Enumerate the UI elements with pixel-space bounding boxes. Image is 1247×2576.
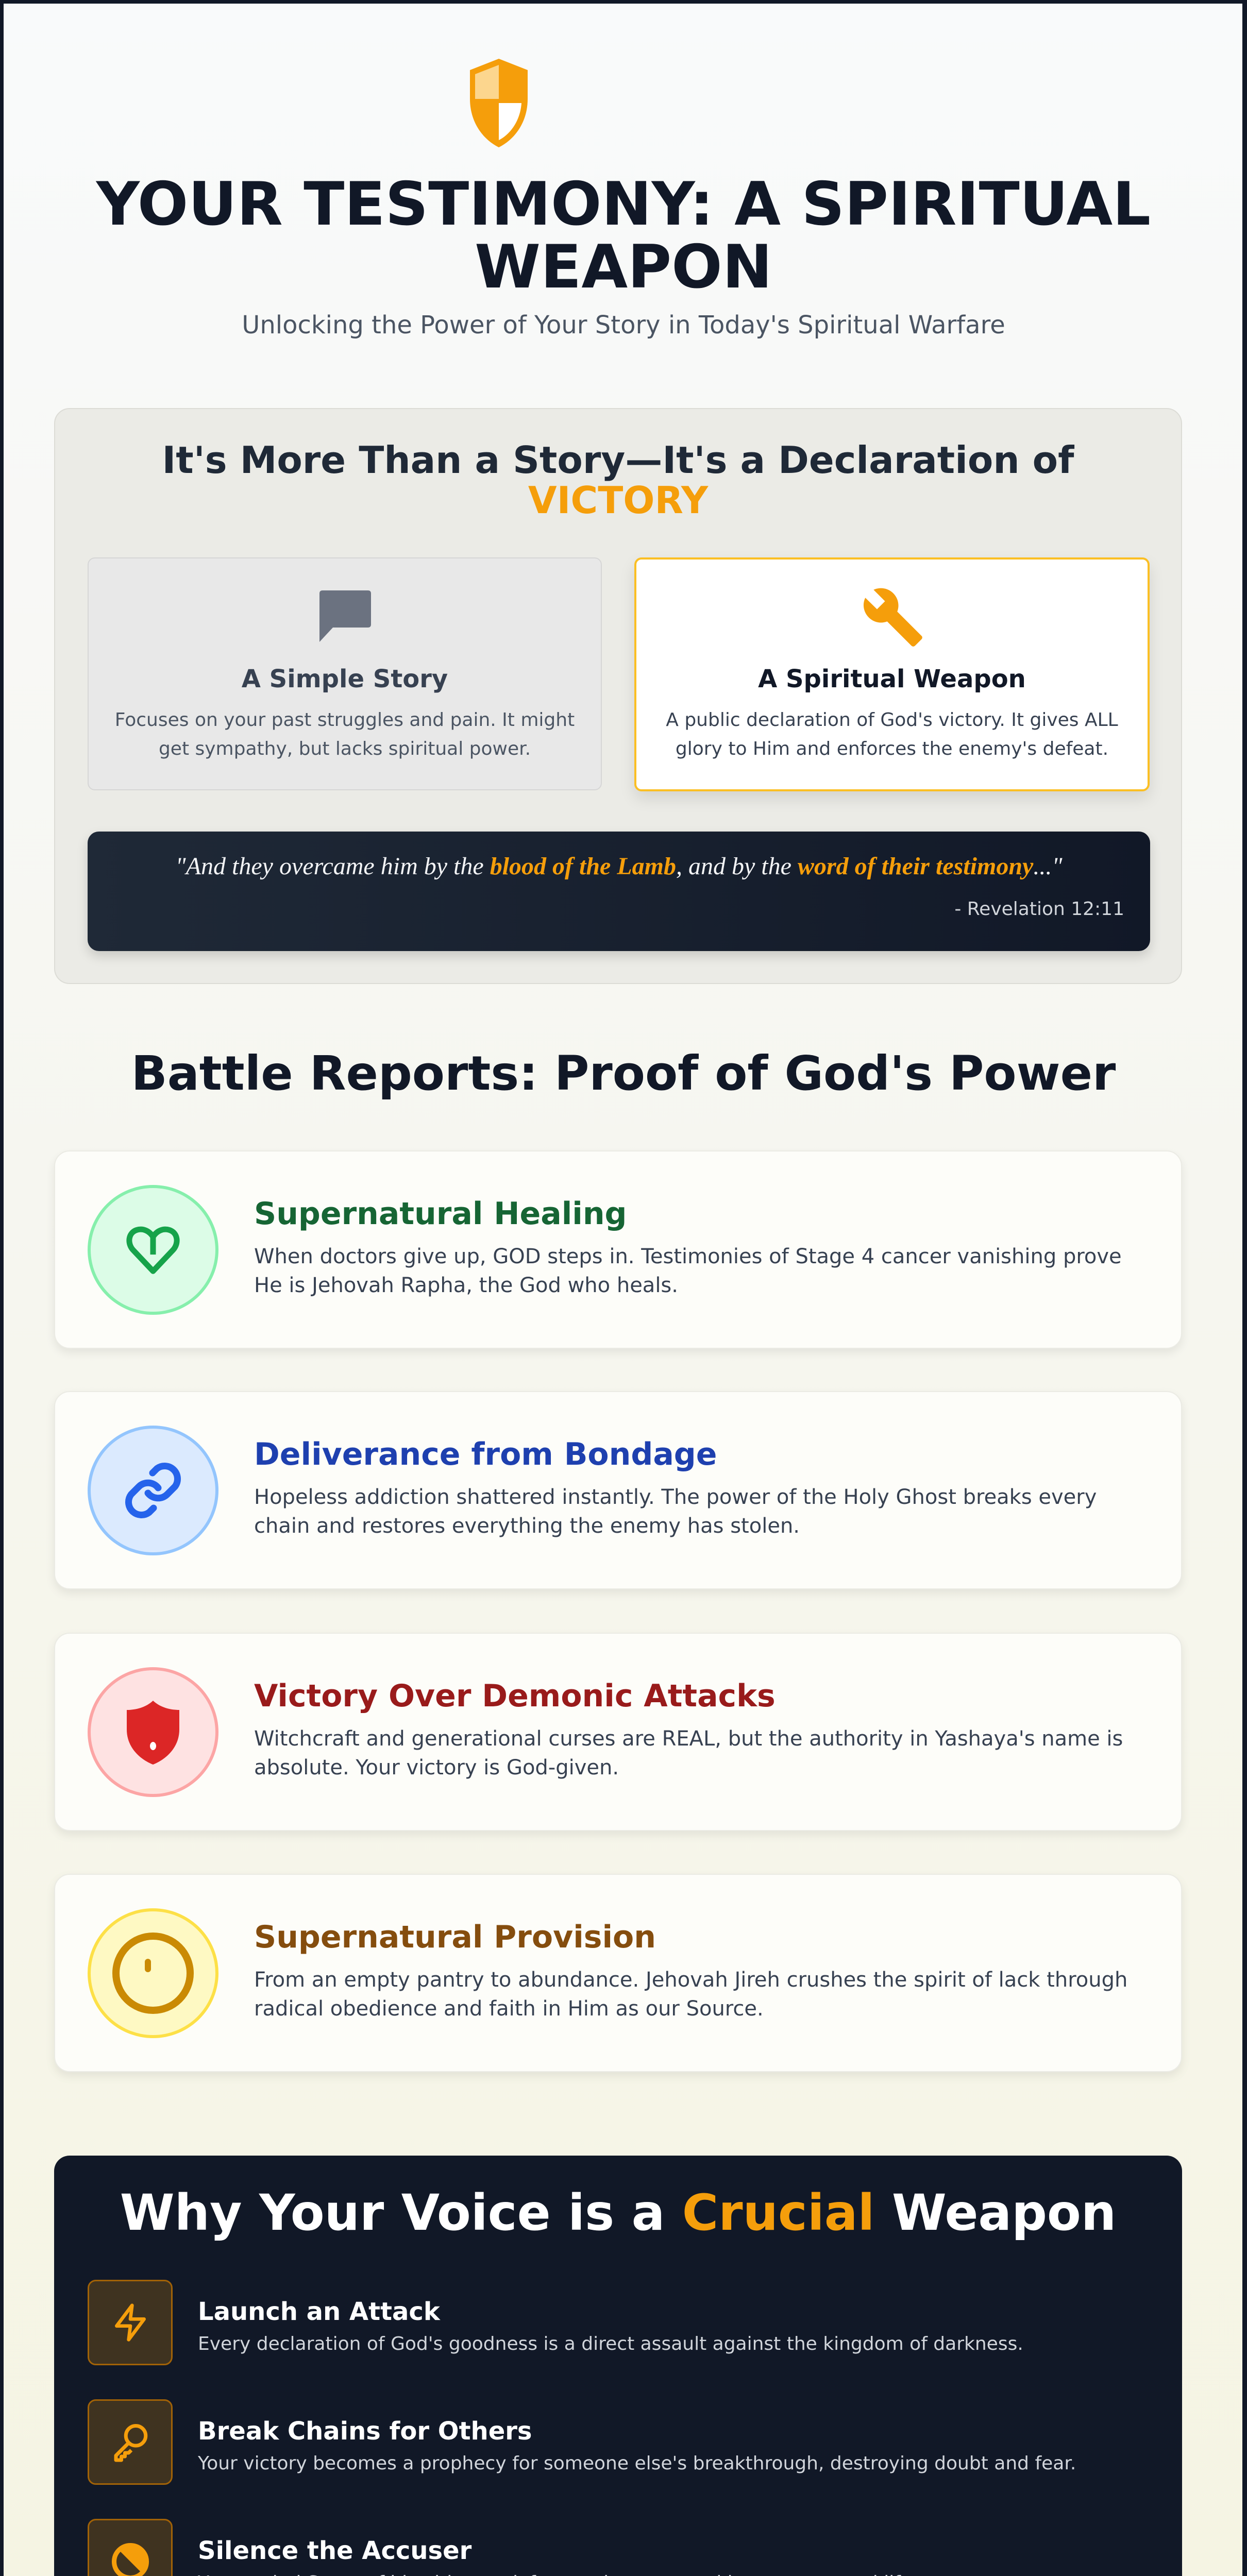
text: When doctors give up, GOD steps in. Testimonies of Stage 4 cancer vanishing prove He is Jehovah Rapha, the God who heals. — [254, 1245, 1122, 1297]
heading: battle reports: Battle Reports: Proof of God's Power — [131, 1046, 1116, 1101]
card: deliverance — [54, 1391, 1182, 1589]
icon: coin — [88, 1908, 218, 2038]
icon: blocked circle — [88, 2519, 173, 2576]
card: spiritual weapon — [634, 557, 1150, 791]
card: demonic attacks — [54, 1633, 1182, 1831]
scripture quote: "And they overcame him by the blood of the Lamb, and by the word of their testimony..." — [176, 853, 1062, 880]
title: WEAPON — [475, 232, 772, 302]
reference: - Revelation 12:11 — [954, 899, 1124, 920]
icon: chat bubble — [319, 590, 371, 642]
item: break chains — [88, 2399, 1076, 2485]
icon: red shield — [88, 1667, 218, 1797]
item: silence accuser — [88, 2519, 918, 2576]
card title: A Spiritual Weapon — [758, 665, 1026, 693]
text: Hopeless addiction shattered instantly. The power of the Holy Ghost breaks every chain and restores everything the enemy has stolen. — [254, 1485, 1097, 1538]
item: launch an attack — [88, 2280, 1023, 2365]
text: Your victory becomes a prophecy for someone else's breakthrough, destroying doubt and fear. — [198, 2453, 1076, 2474]
title: Victory Over Demonic Attacks — [254, 1678, 776, 1714]
text: Witchcraft and generational curses are REAL, but the authority in Yashaya's name is absolute. Your victory is God-given. — [254, 1727, 1123, 1780]
title: Break Chains for Others — [198, 2417, 532, 2446]
text: From an empty pantry to abundance. Jehovah Jireh crushes the spirit of lack through radical obedience and faith in Him as our Source. — [254, 1968, 1127, 2021]
card text: A public declaration of God's victory. It gives ALL glory to Him and enforces the enemy's defeat. — [666, 709, 1118, 759]
card: simple story — [88, 557, 602, 790]
title: Supernatural Healing — [254, 1196, 627, 1232]
icon: key — [88, 2399, 173, 2485]
panel: why your voice — [54, 2156, 1182, 2576]
card: supernatural healing — [54, 1150, 1182, 1349]
title: Deliverance from Bondage — [254, 1436, 717, 1472]
icon: heart — [88, 1185, 218, 1315]
panel heading: It's More Than a Story—It's a Declaration of — [162, 438, 1074, 482]
panel heading — [162, 438, 1075, 522]
card title: A Simple Story — [242, 665, 448, 693]
icon: wrench — [864, 588, 922, 647]
title: YOUR TESTIMONY: A SPIRITUAL — [96, 170, 1151, 239]
text: Every declaration of God's goodness is a direct assault against the kingdom of darkness. — [198, 2333, 1023, 2354]
icon: lightning — [88, 2280, 173, 2365]
title — [96, 170, 1151, 302]
subtitle: Unlocking the Power of Your Story in Today's Spiritual Warfare — [242, 311, 1005, 340]
icon: chain link — [88, 1426, 218, 1555]
title: Silence the Accuser — [198, 2536, 471, 2565]
panel heading: VICTORY — [528, 479, 708, 522]
icon: shield — [470, 59, 528, 147]
panel heading: Why Your Voice is a Crucial Weapon — [120, 2184, 1116, 2242]
card: provision — [54, 1874, 1182, 2072]
card text: Focuses on your past struggles and pain. It might get sympathy, but lacks spiritual power. — [115, 709, 575, 759]
quote box — [88, 832, 1150, 951]
title: Supernatural Provision — [254, 1919, 656, 1955]
title: Launch an Attack — [198, 2297, 440, 2326]
panel: story vs weapon — [54, 408, 1182, 984]
